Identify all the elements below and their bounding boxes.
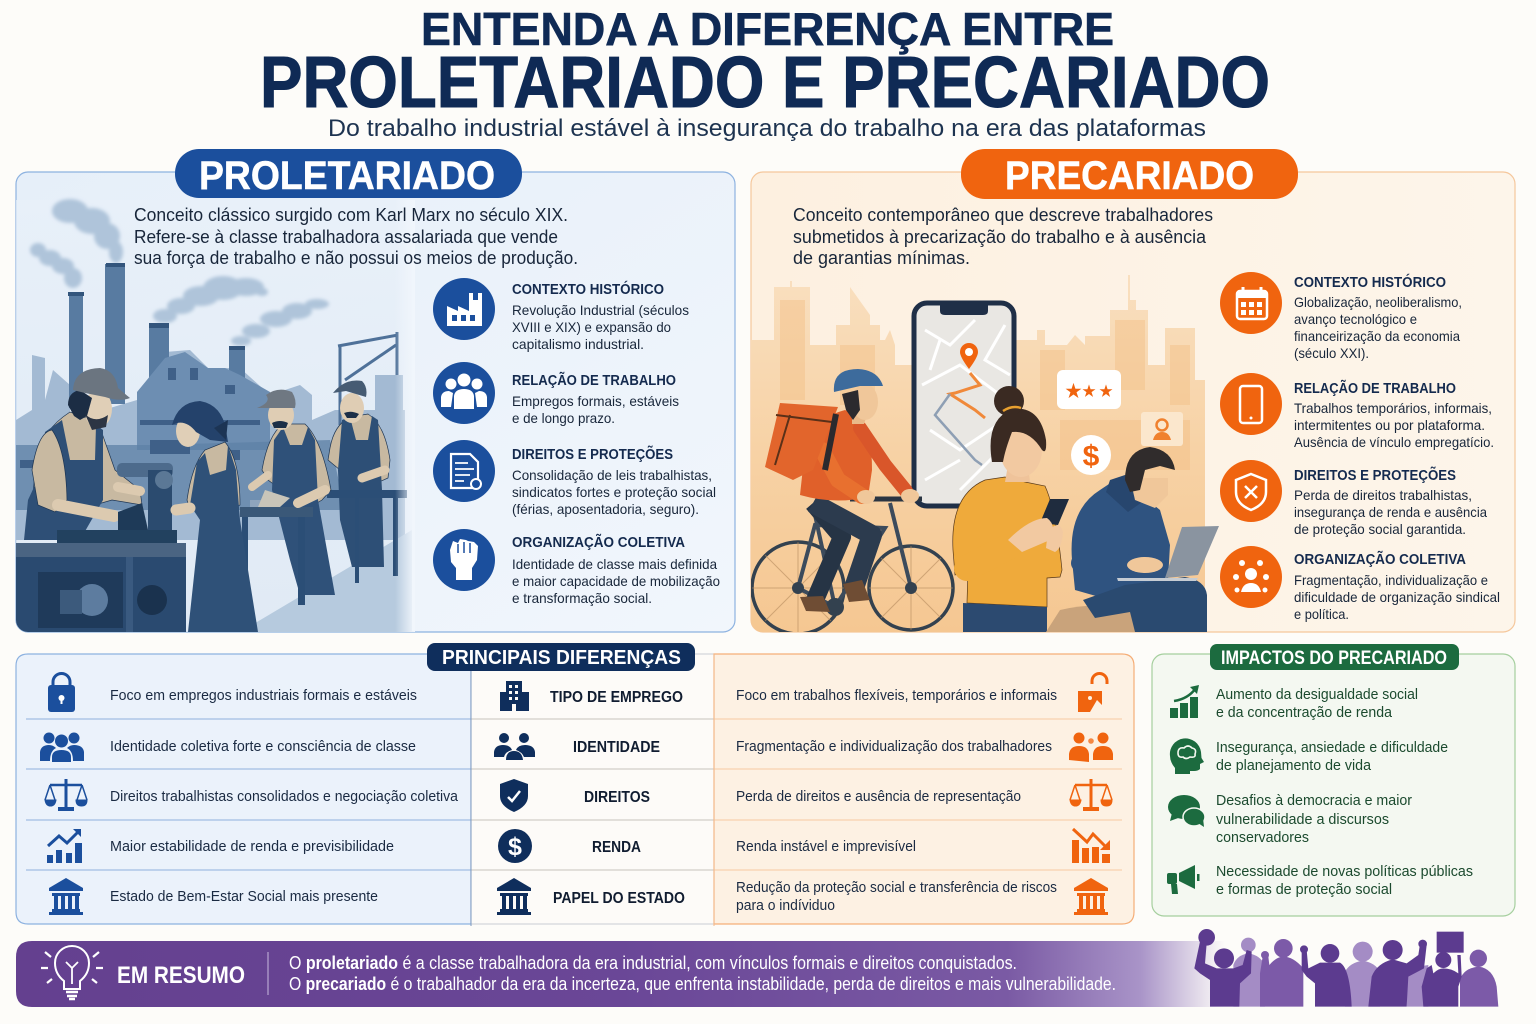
summary text: O proletariado é a classe trabalhadora da era industrial, com vínculos formais e direitos conquistados. (289, 953, 1017, 973)
illustration: industrial workers (16, 199, 415, 632)
icon: speech bubbles (1168, 795, 1205, 827)
item: relação de trabalho: Ausência de vínculo empregatício. (1294, 434, 1494, 450)
intro text: proletariado: sua força de trabalho e não possui os meios de produção. (134, 247, 578, 268)
item: direitos e proteções: (férias, aposentadoria, seguro). (512, 501, 699, 517)
row: papel do estado (49, 878, 1108, 915)
illustration: crowd silhouettes (1194, 929, 1498, 1007)
icon: calendar (1220, 272, 1282, 334)
cyclist (752, 369, 953, 634)
item: relação de trabalho (1220, 373, 1494, 450)
banner: em resumo (16, 929, 1498, 1007)
item: organização coletiva: dificuldade de organização sindical (1294, 589, 1500, 605)
impact: democracia: conservadores (1216, 829, 1309, 846)
icon: rising bars (1170, 685, 1199, 718)
item: contexto histórico: Globalização, neoliberalismo, (1294, 294, 1462, 310)
woman with phone (953, 386, 1069, 632)
impact: políticas públicas (1167, 863, 1473, 898)
impact: insegurança: de planejamento de vida (1216, 757, 1372, 774)
item: direitos e proteções: DIREITOS E PROTEÇÕES (512, 445, 673, 463)
row: direitos: Perda de direitos e ausência de representação (736, 788, 1021, 805)
intro text: proletariado: Conceito clássico surgido com Karl Marx no século XIX. (134, 204, 568, 225)
item: direitos e proteções: DIREITOS E PROTEÇÕES (1294, 466, 1456, 484)
icon: scales orange (1070, 779, 1112, 811)
worker 2 (172, 401, 258, 632)
item: direitos e proteções: sindicatos fortes e proteção social (512, 484, 716, 500)
floating card: rating: ★ (1099, 383, 1113, 399)
icon: scales blue (45, 779, 87, 811)
worker 3 hand (298, 490, 325, 503)
icon: closed lock (48, 674, 75, 712)
row: tipo de emprego: TIPO DE EMPREGO (550, 689, 683, 706)
panel label: precariado: PRECARIADO (1005, 154, 1254, 198)
title line 2: PROLETARIADO E PRECARIADO (260, 43, 1270, 123)
row: tipo de emprego: Foco em trabalhos flexíveis, temporários e informais (736, 687, 1057, 704)
heading: IMPACTOS DO PRECARIADO (1221, 648, 1447, 669)
phone with map (914, 303, 1014, 506)
row: direitos: Direitos trabalhistas consolidados e negociação coletiva (110, 788, 459, 805)
item: organização coletiva: e maior capacidade de mobilização (512, 573, 720, 589)
city skyline (751, 275, 1205, 632)
precariado column (714, 654, 1134, 924)
row: papel do estado: PAPEL DO ESTADO (553, 890, 685, 907)
row: papel do estado: Redução da proteção social e transferência de riscos (736, 879, 1057, 896)
icon: falling chart (1072, 829, 1110, 863)
item: organização coletiva: e política. (1294, 606, 1349, 622)
impact: desigualdade (1170, 685, 1418, 721)
summary text (289, 953, 1116, 994)
icon: raised fist (433, 529, 495, 591)
worker 4 (328, 380, 390, 567)
row: papel do estado: para o indíviduo (736, 897, 835, 914)
row: renda: Maior estabilidade de renda e previsibilidade (110, 838, 394, 855)
item: direitos e proteções: Perda de direitos trabalhistas, (1294, 487, 1472, 503)
summary text: O precariado é o trabalhador da era da incerteza, que enfrenta instabilidade, perda de direitos e mais vulnerabilidade. (289, 974, 1116, 994)
item: contexto histórico (433, 278, 689, 352)
impact: desigualdade: Aumento da desigualdade social (1216, 686, 1418, 703)
icon: megaphone (1167, 865, 1200, 894)
intro text: proletariado (134, 204, 578, 268)
item: contexto histórico: XVIII e XIX) e expansão do (512, 319, 671, 335)
item: contexto histórico: CONTEXTO HISTÓRICO (512, 280, 664, 298)
ground (256, 531, 412, 632)
item: direitos e proteções: Consolidação de leis trabalhistas, (512, 467, 712, 483)
item: relação de trabalho: RELAÇÃO DE TRABALHO (512, 371, 676, 389)
floating card: profile (1141, 412, 1183, 446)
icon: institution orange (1074, 878, 1108, 915)
item: relação de trabalho: Empregos formais, estáveis (512, 393, 679, 409)
row: identidade: Fragmentação e individualização dos trabalhadores (736, 738, 1052, 755)
icon: head with brain (1170, 738, 1204, 774)
item: contexto histórico: Revolução Industrial (séculos (512, 302, 689, 318)
item: relação de trabalho: Trabalhos temporários, informais, (1294, 400, 1492, 416)
row: direitos (45, 779, 1112, 812)
intro text: precariado: Conceito contemporâneo que descreve trabalhadores (793, 204, 1213, 225)
floating card: rating (1057, 370, 1121, 409)
impact: insegurança: Insegurança, ansiedade e dificuldade (1216, 739, 1448, 756)
panel: proletariado (16, 149, 735, 632)
panel: precariado (751, 149, 1515, 634)
icon: document (433, 440, 495, 502)
item: relação de trabalho: intermitentes ou por plataforma. (1294, 417, 1485, 433)
subtitle: Do trabalho industrial estável à insegurança do trabalho na era das plataformas (328, 115, 1206, 142)
item: organização coletiva: e transformação social. (512, 590, 652, 606)
impact: democracia: vulnerabilidade a discursos (1216, 811, 1389, 828)
icon: people (494, 733, 535, 760)
impact: políticas públicas: Necessidade de novas políticas públicas (1216, 863, 1473, 880)
impact: democracia: Desafios à democracia e maior (1216, 792, 1412, 809)
middle bench (240, 490, 313, 605)
item: contexto histórico: avanço tecnológico e (1294, 311, 1417, 327)
illustration: platform workers (751, 275, 1219, 634)
row: tipo de emprego (48, 674, 1107, 712)
label: EM RESUMO (117, 962, 245, 989)
title (260, 3, 1270, 142)
icon: light bulb (41, 946, 103, 999)
item: relação de trabalho: e de longo prazo. (512, 410, 615, 426)
heading: PRINCIPAIS DIFERENÇAS (442, 647, 681, 669)
item: organização coletiva (433, 529, 720, 606)
icon: smartphone (1220, 373, 1282, 435)
impact: políticas públicas: e formas de proteção social (1216, 881, 1392, 898)
worker 3 (252, 390, 335, 595)
proletariado column (16, 654, 471, 924)
criteria column (471, 654, 714, 924)
row: identidade: Identidade coletiva forte e consciência de classe (110, 738, 416, 755)
icon: institution blue (49, 878, 83, 915)
workbench (16, 543, 186, 632)
icon: institution navy (497, 878, 531, 915)
item: organização coletiva: ORGANIZAÇÃO COLETIVA (512, 533, 685, 551)
icon: buildings (500, 681, 529, 711)
row: renda: Renda instável e imprevisível (736, 838, 916, 855)
worker 1 (24, 368, 142, 540)
row: renda (47, 829, 1110, 863)
icon: workers (433, 362, 495, 424)
panel: impactos do precariado (1152, 644, 1515, 916)
icon: group of three (40, 732, 84, 762)
item: relação de trabalho (433, 362, 679, 426)
item: contexto histórico: financeirização da economia (1294, 328, 1460, 344)
icon: shield check (500, 779, 528, 812)
far factory layer (16, 350, 405, 540)
item: contexto histórico (1220, 272, 1462, 361)
icon: dollar coin: $ (508, 833, 522, 861)
item: direitos e proteções: de proteção social garantida. (1294, 521, 1466, 537)
impact: desigualdade: e da concentração de renda (1216, 704, 1393, 721)
row: identidade (40, 732, 1113, 762)
row: renda: RENDA (592, 839, 641, 856)
item: relação de trabalho: RELAÇÃO DE TRABALHO (1294, 379, 1456, 397)
panel: principais diferenças (16, 643, 1134, 926)
icon: separated people (1069, 732, 1113, 762)
item: organização coletiva: ORGANIZAÇÃO COLETIVA (1294, 550, 1466, 568)
intro text: precariado: submetidos à precarização do trabalho e à ausência (793, 226, 1207, 247)
item: contexto histórico: capitalismo industrial. (512, 336, 644, 352)
man with laptop (1046, 447, 1219, 632)
intro text: precariado (793, 204, 1213, 268)
item: contexto histórico: CONTEXTO HISTÓRICO (1294, 273, 1446, 291)
icon: dollar coin (498, 829, 532, 863)
crane (338, 332, 398, 425)
row: tipo de emprego: Foco em empregos industriais formais e estáveis (110, 687, 417, 704)
row: direitos: DIREITOS (584, 789, 650, 806)
floating card: rating: ★ (1065, 382, 1082, 401)
item: organização coletiva (1220, 546, 1500, 622)
icon: rising chart (47, 829, 82, 863)
item: direitos e proteções (433, 440, 716, 517)
floating icon: dollar: $ (1083, 440, 1100, 473)
intro text: proletariado: Refere-se à classe trabalhadora assalariada que vende (134, 226, 558, 247)
icon: open lock (1078, 674, 1107, 712)
icon: factory (433, 278, 495, 340)
floating card: rating: ★ (1082, 383, 1096, 399)
panel label: proletariado: PROLETARIADO (199, 154, 495, 198)
item: organização coletiva: Identidade de classe mais definida (512, 556, 717, 572)
impact: democracia (1168, 792, 1412, 846)
icon: fragmented network (1220, 546, 1282, 608)
impact: insegurança (1170, 738, 1448, 774)
title line 1: ENTENDA A DIFERENÇA ENTRE (421, 3, 1114, 55)
row: identidade: IDENTIDADE (573, 739, 660, 756)
machine (57, 463, 177, 544)
item: organização coletiva: Fragmentação, individualização e (1294, 572, 1488, 588)
item: direitos e proteções: insegurança de renda e ausência (1294, 504, 1487, 520)
item: contexto histórico: (século XXI). (1294, 345, 1369, 361)
row: papel do estado: Estado de Bem-Estar Social mais presente (110, 888, 378, 905)
floating icon: dollar (1071, 435, 1111, 475)
item: direitos e proteções (1220, 460, 1487, 537)
icon: shield with cross (1220, 460, 1282, 522)
far bench (327, 490, 407, 583)
intro text: precariado: de garantias mínimas. (793, 247, 970, 268)
